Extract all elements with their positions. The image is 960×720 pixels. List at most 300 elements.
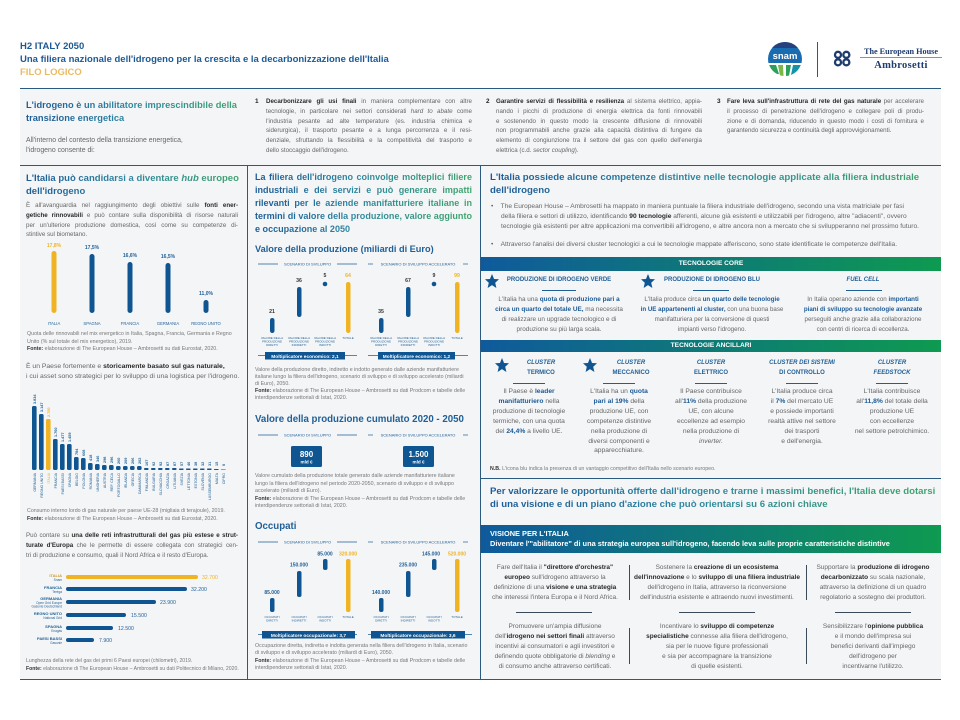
card text bbox=[804, 296, 922, 333]
card text: produzione UE bbox=[870, 408, 914, 415]
bar chart: renewables share: 17,8% bbox=[47, 243, 62, 249]
bar chart: gas consumption: 1.760 bbox=[54, 427, 58, 437]
chart: employment: 235.000 bbox=[399, 562, 417, 568]
bar chart: renewables share: GERMANIA bbox=[157, 321, 179, 326]
card rule bbox=[786, 383, 818, 384]
intro heading bbox=[26, 99, 251, 125]
network text: Può contare su una delle reti infrastrutturali del gas più estese e strut- bbox=[26, 532, 238, 539]
bar chart: gas consumption: 418 bbox=[89, 455, 93, 461]
action 3: Supportare la produzione di idrogeno bbox=[816, 564, 930, 571]
icon: star green hydrogen bbox=[485, 274, 499, 288]
point 3 text: il processo di penetrazione dell'idrogeno e collegare poli di produ- bbox=[727, 108, 924, 115]
card text: pari al 19% della bbox=[594, 398, 644, 405]
chart: employment: SCENARIO DI SVILUPPO ACCELERATO bbox=[381, 540, 455, 544]
bullet text bbox=[491, 203, 919, 248]
bar chart: gas consumption: 668 bbox=[82, 450, 86, 456]
bar chart: gas network length: 32.700 bbox=[202, 575, 218, 581]
note: N.B. L'icona blu indica la presenza di un vantaggio competitivo dell'Italia nello scenario europeo. bbox=[490, 466, 716, 472]
logo divider bbox=[817, 42, 818, 77]
renewables caption: Unito (% sul totale del mix energetico), 2019. bbox=[27, 339, 132, 345]
bar chart: gas network length: 7.900 bbox=[99, 638, 112, 644]
bar chart: gas consumption: 38 bbox=[194, 462, 198, 466]
card: thermal cluster bbox=[493, 360, 565, 435]
bar chart: gas consumption: CIPRO bbox=[222, 473, 226, 484]
production value caption: di Euro), 2050. bbox=[255, 381, 290, 387]
chart: employment: 150.000 bbox=[290, 562, 308, 568]
chart: employment: 320.000 bbox=[339, 552, 357, 558]
bullet text: tecnologie già esistenti per altre applicazioni ma convertibili all'idrogeno, e altre ancora non a mercato che si svilupperanno nel prossimo futuro. bbox=[501, 223, 919, 230]
card text: del 24,4% a livello UE. bbox=[496, 428, 562, 435]
bar chart: gas consumption: 87 bbox=[173, 462, 177, 466]
action 2: dell'industria esistente e attraendo nuovi investimenti. bbox=[640, 594, 794, 601]
card text: L'Italia contribuisce bbox=[864, 388, 920, 395]
hub text: È all'avanguardia nel raggiungimento degli obiettivi sulle fonti ener- bbox=[26, 202, 238, 209]
point 2 text: e sostenendo in questo modo la crescente diffusione di rinnovabili bbox=[496, 118, 702, 125]
hub heading bbox=[26, 172, 246, 198]
bar chart: gas consumption: 32 bbox=[201, 462, 205, 466]
action 5: specialistiche connesse alla filiera dell'idrogeno, bbox=[646, 633, 788, 640]
network caption bbox=[26, 658, 239, 672]
action 4: Promuovere un'ampia diffusione bbox=[509, 623, 601, 630]
card heading: DI CONTROLLO bbox=[779, 370, 825, 376]
bar chart: gas consumption: 209 bbox=[124, 458, 128, 464]
bar chart: gas network length bbox=[32, 573, 218, 645]
bar chart: gas network length: Gasunie bbox=[50, 641, 62, 645]
card heading: CLUSTER bbox=[878, 360, 906, 366]
bar chart: renewables share: 11,0% bbox=[199, 291, 214, 297]
bar chart: gas consumption: 202 bbox=[138, 458, 142, 464]
chart: employment: SCENARIO DI SVILUPPO bbox=[284, 540, 331, 544]
action 4: incentivi ai consumatori e agli investitori e bbox=[495, 643, 615, 650]
panel: left column hub bbox=[20, 166, 247, 680]
network caption: Lunghezza della rete del gas dei primi 6 Paesi europei (chilometri), 2019. bbox=[26, 658, 192, 664]
point 1 text: dello stoccaggio dell'idrogeno. bbox=[266, 147, 349, 154]
bar chart: gas consumption: ROMANIA bbox=[89, 472, 93, 489]
bar chart: gas network length: ITALIA bbox=[49, 573, 62, 578]
card text: nella produzione di bbox=[591, 428, 647, 435]
action 5: sia per le nuove figure professionali bbox=[666, 643, 768, 650]
bar chart: gas consumption: 260 bbox=[117, 458, 121, 464]
action 3: regolatorio a sostegno dei produttori. bbox=[820, 594, 926, 601]
chart: employment: DIRETTI bbox=[375, 618, 387, 622]
bar chart: gas consumption: 57 bbox=[180, 462, 184, 466]
bar chart: gas consumption: GRECIA bbox=[131, 472, 135, 486]
action 4: di consumo anche attraverso certificati. bbox=[499, 663, 611, 670]
gas caption: Consumo interno lordo di gas naturale per paese UE-28 (migliaia di terajoule), 2019. bbox=[27, 508, 225, 514]
card text bbox=[669, 387, 753, 447]
bar chart: gas consumption bbox=[32, 394, 226, 500]
card rule bbox=[693, 290, 729, 291]
chart: employment bbox=[258, 540, 472, 639]
network text bbox=[26, 532, 238, 559]
point 3 text bbox=[727, 98, 924, 134]
card heading bbox=[527, 360, 556, 376]
chart: employment: OCCUPATI bbox=[291, 615, 307, 619]
employment caption: Occupazione diretta, indiretta e indotta generata nella filiera dell'idrogeno in Italia, scenario bbox=[255, 643, 467, 649]
card text: produzione su più larga scala. bbox=[517, 326, 601, 333]
chart: production value: PRODUZIONE bbox=[398, 340, 418, 344]
bar chart: gas consumption: PAESI BASSI bbox=[61, 473, 65, 494]
card rule bbox=[846, 290, 882, 291]
card text: manifatturiero nella bbox=[499, 398, 559, 405]
chart: production value: VALORE DELLA bbox=[370, 336, 392, 340]
bar chart: renewables share: REGNO UNITO bbox=[191, 321, 221, 326]
card: green hydrogen bbox=[495, 276, 623, 333]
chart: employment: INDIRETTI bbox=[292, 618, 306, 622]
point 1 text: siderurgica), il trasporto pesante e a lunga percorrenza e il resi- bbox=[266, 127, 472, 134]
chart: production value: Moltiplicatore economico: 1,2 bbox=[383, 354, 451, 360]
action 1: Fare dell'Italia il "direttore d'orchestra" bbox=[497, 564, 613, 571]
intro text bbox=[26, 136, 183, 154]
network text: turate d'Europa che le permette di essere collegata con strategici cen- bbox=[26, 542, 238, 549]
card text: all'11% della produzione bbox=[675, 398, 747, 405]
bar chart: gas network length: PAESI BASSI bbox=[37, 636, 62, 641]
logo mark bbox=[834, 50, 850, 66]
chart: cumulated value boxes bbox=[258, 432, 468, 467]
bar chart: gas consumption: AUSTRIA bbox=[103, 472, 107, 488]
card: electric cluster bbox=[669, 358, 753, 458]
chart: production value: PRODUZIONE bbox=[424, 340, 444, 344]
card heading: CLUSTER bbox=[527, 360, 555, 366]
point 1 text bbox=[266, 98, 472, 154]
cumulated value caption bbox=[255, 473, 465, 509]
chart: production value: 36 bbox=[296, 278, 302, 284]
employment caption: Fonte: elaborazione di The European House – Ambrosetti su dati Prodcom e tabelle delle bbox=[255, 658, 465, 664]
card text: Il Paese è leader bbox=[503, 388, 555, 395]
panel: intro bbox=[20, 88, 941, 166]
panel: middle column bbox=[248, 166, 480, 680]
action 5: Incentivare lo sviluppo di competenze bbox=[660, 623, 774, 630]
point 3 text: garantendo sicurezza e continuità degli approvvigionamenti. bbox=[727, 127, 891, 134]
logo text: Ambrosetti bbox=[874, 60, 928, 71]
chart: employment: DIRETTI bbox=[266, 618, 278, 622]
action 6: e il mondo dell'impresa sui bbox=[835, 633, 911, 640]
intro text: l'idrogeno consente di: bbox=[26, 147, 95, 154]
vision banner bbox=[481, 525, 941, 553]
icon: star blue hydrogen bbox=[641, 274, 655, 288]
heading: production value: Valore della produzione (miliardi di Euro) bbox=[255, 244, 434, 254]
card heading bbox=[612, 360, 650, 376]
bar chart: gas network length: FRANCIA bbox=[44, 585, 62, 590]
chart: employment: OCCUPATI bbox=[264, 615, 280, 619]
middle heading bbox=[255, 171, 472, 236]
action 3 bbox=[808, 563, 938, 603]
bar chart: gas network length: GERMANIA bbox=[40, 596, 62, 601]
chart: production value: VALORE DELLA bbox=[423, 336, 445, 340]
chart: employment: 145.000 bbox=[422, 552, 440, 558]
bar chart: gas consumption: SPAGNA bbox=[68, 472, 72, 487]
bar chart: gas network length: 12.500 bbox=[118, 626, 134, 632]
action 1: che interessi l'intera Europa e il Nord Africa. bbox=[492, 594, 618, 601]
bar chart: gas consumption: SVEZIA bbox=[180, 472, 184, 485]
chart: employment: TOTALE bbox=[342, 615, 354, 619]
card rule bbox=[603, 383, 635, 384]
bar chart: gas consumption: 92 bbox=[152, 462, 156, 466]
hub text bbox=[26, 201, 238, 238]
chart: production value: 5 bbox=[324, 273, 327, 279]
banner: tecnologie core: TECNOLOGIE CORE bbox=[679, 260, 743, 267]
panel: vision bbox=[481, 479, 941, 680]
chart: employment: TOTALE bbox=[451, 615, 463, 619]
bullet text: • Attraverso l'analisi dei diversi cluster tecnologici a cui le tecnologie mappate afferiscono, sono state identificate le competenze dell'Italia. bbox=[491, 241, 897, 248]
hub text: getiche rinnovabili e può contare sulla disponibilità di risorse naturali bbox=[26, 212, 238, 219]
point 2 text: elemento di congiunzione tra il settore del gas con quello dell'energia bbox=[496, 137, 702, 144]
action 6 bbox=[808, 622, 938, 672]
chart: cumulated value boxes: SCENARIO DI SVILUPPO ACCELERATO bbox=[381, 432, 455, 438]
bullet text: • The European House – Ambrosetti ha mappato in maniera puntuale la filiera industriale dell'idrogeno, secondo una vista matriciale per fasi bbox=[491, 203, 904, 210]
card heading: PRODUZIONE DI IDROGENO VERDE bbox=[507, 277, 611, 283]
action 3: decarbonizzato su scala nazionale, bbox=[821, 574, 925, 581]
card text bbox=[850, 387, 934, 437]
action 1: definizione di una visione e una strategia bbox=[494, 584, 616, 591]
bar chart: gas consumption: SLOVENIA bbox=[201, 472, 205, 491]
card heading: CLUSTER DEI SISTEMI bbox=[769, 360, 835, 366]
card text: di realizzare un upgrade tecnologico e di bbox=[502, 316, 616, 323]
card: control systems cluster bbox=[760, 358, 844, 458]
card text: in UE appartenenti al cluster, con una buona base bbox=[641, 306, 783, 313]
bar chart: renewables share: FRANCIA bbox=[121, 321, 139, 326]
bar chart: gas consumption: SLOVACCHIA bbox=[159, 472, 163, 495]
number 2: 2 bbox=[486, 98, 490, 105]
card text: L'Italia ha una quota di produzione pari a bbox=[498, 296, 620, 303]
bar chart: gas consumption: FRANCIA bbox=[54, 472, 58, 488]
chart: cumulated value boxes: mld € bbox=[300, 460, 313, 464]
technologies heading bbox=[490, 171, 935, 197]
header title block: Una filiera nazionale dell'idrogeno per la crescita e la decarbonizzazione dell'Italia bbox=[20, 54, 389, 65]
card text bbox=[760, 387, 844, 447]
bar chart: gas consumption: ITALIA bbox=[47, 472, 51, 483]
card heading: CLUSTER bbox=[617, 360, 645, 366]
bar chart: gas consumption: 1.459 bbox=[68, 432, 72, 442]
card: fuel cell bbox=[804, 276, 922, 333]
bar chart: gas consumption: ESTONIA bbox=[194, 472, 198, 488]
header title block: FILO LOGICO bbox=[20, 67, 82, 78]
cumulated value caption: Fonte: elaborazione di The European House – Ambrosetti su dati Prodcom e tabelle delle bbox=[255, 496, 465, 502]
card text: L'Italia ha un quota bbox=[590, 388, 648, 395]
card text: termiche, con una quota bbox=[493, 418, 565, 425]
point 3 text: zione e di domanda, riducendo in questo modo i costi di fornitura e bbox=[727, 118, 924, 125]
action 1: europeo sull'idrogeno attraverso la bbox=[504, 574, 606, 581]
bar chart: gas network length: Open Grid Europe bbox=[36, 601, 62, 605]
bar chart: gas consumption: 31 bbox=[208, 462, 212, 466]
cumulated value caption: lungo la filiera dell'idrogeno nel periodo 2020-2050, scenario di sviluppo e di sviluppo bbox=[255, 481, 454, 487]
card text: eccellenze ad esempio bbox=[677, 418, 745, 425]
production value caption: italiane lungo la filiera dell'idrogeno, scenario di sviluppo e di sviluppo accelerato (miliardi bbox=[255, 374, 464, 380]
card text bbox=[577, 387, 661, 457]
bar chart: gas consumption: POLONIA bbox=[82, 472, 86, 489]
card text: Il Paese contribuisce bbox=[680, 388, 742, 395]
vision banner: VISIONE PER L'ITALIA bbox=[490, 529, 569, 538]
action 6: Sensibilizzare l'opinione pubblica bbox=[823, 623, 923, 630]
bar chart: gas network length: 15.500 bbox=[131, 613, 147, 619]
chart: production value: SCENARIO DI SVILUPPO ACCELERATO bbox=[381, 262, 455, 266]
card text: produzione UE, con bbox=[590, 408, 648, 415]
bar chart: gas consumption: 346 bbox=[96, 456, 100, 462]
heading: cumulated value: Valore della produzione cumulato 2020 - 2050 bbox=[255, 414, 464, 425]
bar chart: gas network length: Teréga bbox=[52, 590, 62, 594]
employment caption: di sviluppo e di sviluppo accelerato (miliardi di Euro), 2050. bbox=[255, 650, 393, 656]
bar chart: renewables share bbox=[47, 243, 221, 326]
card rule bbox=[695, 383, 727, 384]
banner: tecnologie ancillari bbox=[481, 340, 941, 352]
card heading: ELETTRICO bbox=[694, 370, 728, 376]
bar chart: gas consumption: BULGARIA bbox=[152, 472, 156, 491]
bar chart: gas network length: 23.900 bbox=[160, 600, 176, 606]
gas text bbox=[26, 362, 239, 380]
chart: cumulated value boxes: 1.500 bbox=[408, 450, 429, 459]
gas text: È un Paese fortemente e storicamente basato sul gas naturale, bbox=[26, 363, 225, 370]
production value caption bbox=[255, 367, 465, 401]
card text: nella produzione di bbox=[683, 428, 739, 435]
bar chart: gas consumption: LITUANIA bbox=[173, 472, 177, 489]
card heading bbox=[850, 358, 934, 378]
chart: production value: 99 bbox=[454, 273, 460, 279]
chart: cumulated value boxes: mld € bbox=[412, 460, 425, 464]
banner: tecnologie ancillari: TECNOLOGIE ANCILLARI bbox=[671, 342, 751, 349]
chart: employment: 85.000 bbox=[264, 590, 280, 596]
bar chart: renewables share: 16,5% bbox=[161, 254, 176, 260]
card rule bbox=[876, 383, 908, 384]
chart: employment: OCCUPATI bbox=[426, 615, 442, 619]
bar chart: gas consumption: 3.147 bbox=[40, 402, 44, 412]
chart: production value: PRODUZIONE bbox=[262, 340, 282, 344]
chart: production value: 67 bbox=[405, 278, 411, 284]
icon: star mechanical bbox=[583, 358, 597, 372]
production value caption: Fonte: elaborazione di The European House – Ambrosetti su dati Prodcom e tabelle delle bbox=[255, 388, 465, 394]
bar chart: gas network length: Snam bbox=[54, 578, 62, 582]
bar chart: gas consumption: 784 bbox=[75, 448, 79, 455]
card heading: CLUSTER bbox=[697, 360, 725, 366]
card text: il 7% del mercato UE bbox=[771, 398, 833, 405]
card text: L'Italia produce circa un quarto delle tecnologie bbox=[644, 296, 780, 303]
point 2 text: Garantire servizi di flessibilità e resilienza al sistema elettrico, appia- bbox=[496, 98, 702, 105]
chart: employment: INDOTTI bbox=[319, 618, 331, 622]
bar chart: gas network length: 32.200 bbox=[191, 587, 207, 593]
chart: production value: 35 bbox=[378, 309, 384, 315]
logo: snam bbox=[768, 42, 802, 76]
chart: production value: TOTALE bbox=[451, 336, 463, 340]
card: blue hydrogen bbox=[641, 276, 783, 333]
bar chart: gas consumption: FINLANDIA bbox=[145, 472, 149, 491]
network caption: Fonte: elaborazione di The European House – Ambrosetti su dati Politecnico di Milano, 2020. bbox=[26, 666, 239, 672]
chart: employment: INDOTTI bbox=[428, 618, 440, 622]
action 3: attraverso la definizione di un quadro bbox=[820, 584, 926, 591]
bar chart: renewables share: SPAGNA bbox=[83, 321, 101, 326]
chart: production value: DIRETTI bbox=[375, 343, 387, 347]
bar chart: gas consumption: 40 bbox=[187, 462, 191, 466]
card text: e possiede importanti bbox=[770, 408, 834, 415]
chart: production value bbox=[258, 262, 468, 360]
point 2 text bbox=[496, 98, 702, 154]
gas caption: Fonte: elaborazione di The European House – Ambrosetti su dati Eurostat, 2020. bbox=[27, 516, 218, 522]
card text: competenze distintive bbox=[587, 418, 651, 425]
action 6: incentivarne l'utilizzo. bbox=[842, 663, 904, 670]
card text: all'11,8% del totale della bbox=[856, 398, 928, 405]
action 1 bbox=[482, 563, 628, 603]
number 1: 1 bbox=[255, 98, 259, 105]
action 5: di quelle esistenti. bbox=[691, 663, 743, 670]
card text: e dell'energia. bbox=[781, 438, 823, 445]
production value caption: interdipendenze settoriali di Istat, 2020. bbox=[255, 395, 347, 401]
bar chart: gas consumption: REGNO UNITO bbox=[40, 473, 44, 498]
bar chart: gas consumption: 15 bbox=[215, 462, 219, 466]
bar chart: gas consumption: CROAZIA bbox=[166, 472, 170, 489]
card text: con eccellenze bbox=[870, 418, 914, 425]
chart: employment: 85.000 bbox=[317, 552, 333, 558]
bar chart: gas network length: REGNO UNITO bbox=[34, 611, 62, 616]
bullet text: della filiera e settori di utilizzo, identificando 90 tecnologie afferenti, alcune già esistenti e utilizzabili per l'idrogeno, altre "adiacenti", ovvero bbox=[501, 213, 907, 220]
bar chart: gas consumption: GERMANIA bbox=[33, 472, 37, 492]
card rule bbox=[513, 383, 545, 384]
card text: realtà attive nel settore bbox=[768, 418, 836, 425]
card text: manifatturiera per la conversione di questi bbox=[655, 316, 769, 323]
logo text bbox=[860, 47, 942, 71]
chart: production value: PRODUZIONE bbox=[371, 340, 391, 344]
renewables caption: Fonte: elaborazione di The European House – Ambrosetti su dati Eurostat, 2020. bbox=[27, 346, 218, 352]
card text bbox=[641, 296, 783, 333]
bar chart: gas consumption: MALTA bbox=[215, 472, 219, 484]
chart: employment: OCCUPATI bbox=[317, 615, 333, 619]
card heading: TERMICO bbox=[527, 370, 555, 376]
card rule bbox=[542, 290, 576, 291]
gas text: i cui asset sono strategici per lo sviluppo di una logistica per l'idrogeno. bbox=[26, 373, 239, 380]
panel: technologies bbox=[481, 166, 941, 479]
card text: In Italia operano aziende con importanti bbox=[807, 296, 919, 303]
card text: piani di sviluppo su tecnologie avanzate bbox=[804, 306, 922, 313]
card text: produzione di tecnologie bbox=[493, 408, 565, 415]
card text: L'Italia produce circa bbox=[771, 388, 833, 395]
bar chart: gas consumption: 0 bbox=[222, 464, 226, 466]
bar chart: gas consumption: REP. CECA bbox=[110, 472, 114, 491]
card text: impianti verso l'idrogeno. bbox=[678, 326, 746, 333]
action 6: dell'idrogeno per bbox=[849, 653, 897, 660]
chart: production value: PRODUZIONE bbox=[289, 340, 309, 344]
point 1 text: tecnologie, in particolare nei settori considerati hard to abate come bbox=[266, 108, 472, 115]
chart: production value: VALORE DELLA bbox=[288, 336, 310, 340]
card: mechanical cluster bbox=[587, 360, 651, 454]
card text: con centri di ricerca di eccellenza. bbox=[817, 326, 909, 333]
hub text: per un'ulteriore produzione domestica, così come su competenze di- bbox=[26, 222, 238, 229]
chart: production value: INDOTTI bbox=[319, 343, 331, 347]
chart: employment: 520.000 bbox=[448, 552, 466, 558]
point 2 text: elettrica (c.d. sector coupling). bbox=[496, 147, 579, 154]
card text bbox=[493, 388, 565, 435]
chart: production value: INDIRETTI bbox=[401, 343, 415, 347]
cumulated value caption: Valore cumulato della produzione totale generato dalle aziende manifatturiere italiane bbox=[255, 473, 455, 479]
point 3 text: Fare leva sull'infrastruttura di rete del gas naturale per accelerare bbox=[727, 98, 924, 105]
bar chart: gas network length: SPAGNA bbox=[45, 624, 62, 629]
vision banner: Diventare l'"abilitatore" di una strategia europea sull'idrogeno, facendo leva sulle proprie caratteristiche distintive bbox=[490, 539, 890, 548]
card text: dei trasporti bbox=[785, 428, 819, 435]
action 6: benefici derivanti dall'impiego bbox=[831, 643, 915, 650]
heading: employment: Occupati bbox=[255, 521, 296, 532]
card heading: FEEDSTOCK bbox=[874, 370, 910, 376]
bar chart: gas consumption: 92 bbox=[159, 462, 163, 466]
chart: production value: Moltiplicatore economico: 2,1 bbox=[271, 354, 339, 360]
chart: production value: INDOTTI bbox=[428, 343, 440, 347]
action 4 bbox=[482, 622, 628, 672]
action 5: e sia per accompagnare la transizione bbox=[662, 653, 772, 660]
bar chart: gas consumption: BELGIO bbox=[75, 473, 79, 486]
bar chart: gas consumption: UNGHERIA bbox=[96, 472, 100, 491]
logo: snam: snam bbox=[773, 51, 797, 62]
bar chart: gas consumption: 296 bbox=[110, 457, 114, 463]
chart: production value: 9 bbox=[433, 273, 436, 279]
chart: production value: SCENARIO DI SVILUPPO bbox=[284, 262, 331, 266]
cumulated value caption: accelerato (miliardi di Euro). bbox=[255, 488, 321, 494]
column divider left bbox=[247, 166, 248, 680]
bar chart: renewables share: 16,6% bbox=[123, 253, 138, 259]
